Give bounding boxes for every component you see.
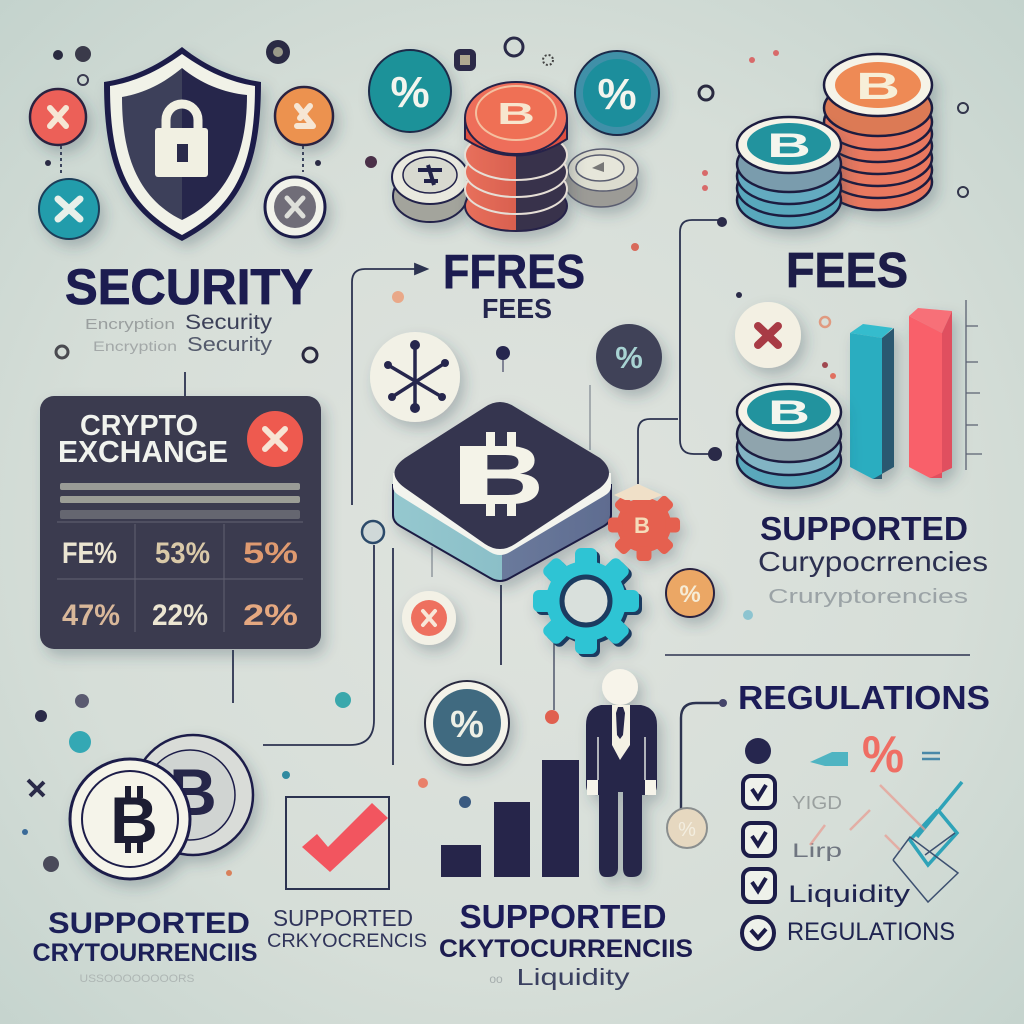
icon: red coin stack (465, 82, 567, 231)
percent mark (810, 726, 940, 784)
text: supported small: SUPPORTED (273, 905, 413, 931)
icon: orange coin (275, 87, 333, 145)
teal stack: B (767, 127, 811, 165)
icon: percent coin left (369, 50, 451, 132)
icon: teal coin stack lower: B (768, 394, 810, 432)
icon: cross coin (735, 302, 801, 368)
table values: 2% (243, 599, 298, 632)
icon: central bitcoin block (393, 402, 611, 581)
coin letter: B (497, 96, 535, 131)
text: supported centre: oo (489, 972, 503, 986)
checklist labels: Lirp (792, 841, 842, 862)
heading: supported currencies right: Curypocrrencies (758, 546, 988, 577)
heading: security: SECURITY (65, 259, 313, 315)
table values: FE% (62, 537, 117, 570)
icon: percent coin centre bottom (425, 681, 509, 765)
checklist: regulations (742, 726, 962, 949)
icon: double bitcoin coins: B (110, 783, 158, 857)
text: supported small: CRKYOCRENCIS (267, 931, 427, 952)
table values: 22% (152, 599, 208, 632)
heading: supported currencies right (758, 510, 988, 608)
table values: 5% (243, 537, 298, 570)
icon: double bitcoin coins (70, 735, 253, 879)
icon: teal gear (533, 548, 642, 657)
orange stack: B (856, 66, 900, 108)
bar chart: two bars (850, 308, 952, 479)
checklist labels: Liquidity (788, 881, 910, 908)
decorative accent dots (22, 38, 968, 876)
checklist labels (787, 793, 955, 946)
title: crypto exchange: CRYPTO (80, 410, 198, 442)
heading: security: Security (185, 311, 273, 334)
heading: supported currencies right: Cruryptorencies (768, 586, 968, 608)
icon: percent coin right: % (597, 70, 637, 119)
heading: fees centre (443, 246, 585, 324)
text: supported centre: CKYTOCURRENCIIS (439, 935, 693, 963)
checklist labels: YIGD (792, 793, 842, 813)
icon: checkbox with red check (286, 797, 389, 889)
icon: teal coin stack lower (737, 384, 841, 488)
heading: supported currencies right: SUPPORTED (760, 510, 968, 547)
checklist labels: REGULATIONS (787, 918, 955, 946)
icon: percent coin left: % (390, 68, 430, 117)
text: supported left: USSOOOOOOOORS (80, 973, 194, 985)
heading: fees centre: FEES (482, 293, 552, 324)
text: supported centre (439, 898, 693, 990)
table rules (57, 483, 303, 632)
heading: fees centre: FFRES (443, 246, 585, 299)
text: supported left: CRYTOURRENCIIS (32, 939, 258, 967)
icon: grey coin (265, 177, 325, 237)
heading: security: Encryption (93, 338, 177, 354)
icon: red gear: B (634, 513, 650, 538)
text: supported left (32, 907, 258, 985)
heading: regulations: REGULATIONS (738, 679, 990, 716)
heading: fees right: FEES (786, 244, 908, 298)
text: supported centre: Liquidity (516, 964, 630, 990)
heading: security (65, 259, 313, 356)
icon: top right coin stacks (737, 54, 932, 228)
percent mark: % (862, 726, 904, 784)
heading: security: Encryption (85, 316, 175, 333)
marker dot (496, 346, 510, 372)
icon: close badge (247, 411, 303, 467)
table values (62, 537, 298, 632)
orange stack (824, 54, 932, 210)
heading: security: Security (187, 334, 272, 356)
table values: 47% (62, 599, 120, 632)
table values: 53% (155, 537, 210, 570)
lattice graphic (810, 782, 962, 902)
icon: dark percent coin (596, 324, 662, 390)
icon: small grey stack right (565, 149, 638, 207)
icon: percent coin right (575, 51, 659, 135)
title: crypto exchange (58, 410, 228, 469)
icon: teal coin (39, 179, 99, 239)
title: crypto exchange: EXCHANGE (58, 434, 228, 469)
decorative accent dots: % (678, 819, 696, 841)
icon: percent small coin (666, 569, 714, 617)
icon: network coin (370, 332, 460, 422)
icon: businessman (586, 669, 657, 877)
icon: security shield (104, 47, 261, 241)
panel: crypto exchange table (40, 396, 321, 649)
text: supported left: SUPPORTED (48, 907, 250, 940)
bar chart: growth bars (441, 760, 579, 877)
icon: dark percent coin: % (615, 340, 643, 375)
teal stack (737, 117, 841, 228)
icon: percent coin centre bottom: % (450, 704, 484, 746)
icon: percent small coin: % (679, 581, 701, 608)
checklist icons (742, 738, 775, 949)
icon: red coin (30, 89, 86, 145)
text: supported centre: SUPPORTED (460, 898, 666, 935)
chart axis (966, 300, 982, 470)
connector lines (61, 146, 970, 810)
icon: red cross coin (402, 591, 456, 645)
icon: red gear (608, 484, 680, 561)
icon: double bitcoin coins: B (169, 755, 217, 829)
bitcoin symbol: B (464, 428, 544, 522)
text: supported small (267, 905, 427, 952)
node circle (362, 521, 384, 543)
icon: small grey stack left (392, 150, 468, 222)
